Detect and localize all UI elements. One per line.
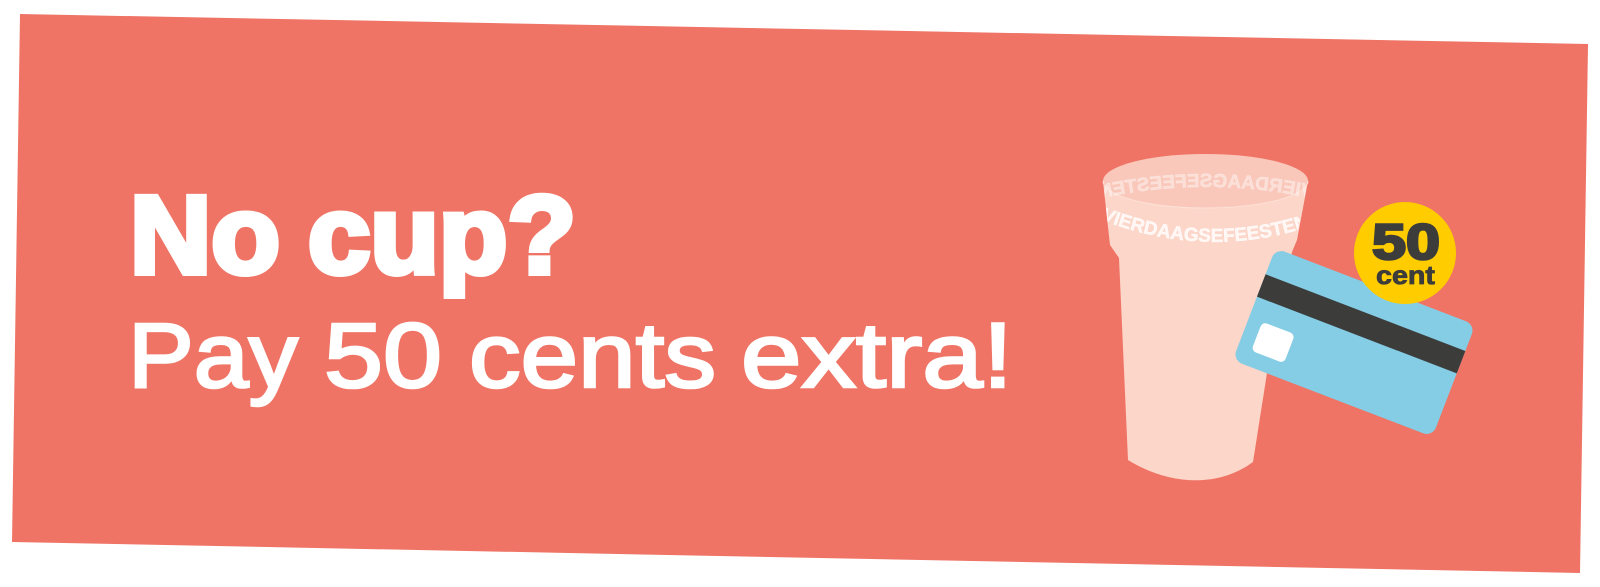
subheading: Pay 50 cents extra!: cents — [469, 305, 716, 407]
badge: 50 cent — [1354, 202, 1456, 304]
text on inside of cup: VIERDAAGSEFEESTEN — [1104, 173, 1306, 198]
card chip — [1251, 322, 1295, 363]
subheading: Pay 50 cents extra!: Pay — [128, 305, 298, 407]
cup body — [1103, 181, 1308, 480]
cup rim opening — [1103, 154, 1308, 208]
heading: No cup?: cup? — [308, 174, 576, 297]
subheading: Pay 50 cents extra!: 50 — [324, 305, 442, 407]
heading: No cup?: No — [130, 174, 280, 297]
badge unit: cent — [1376, 260, 1435, 290]
icon: festival cup — [1102, 154, 1308, 480]
heading: No cup? — [130, 174, 576, 297]
yellow circle — [1354, 202, 1456, 304]
subheading: Pay 50 cents extra!: extra! — [741, 305, 1013, 407]
magnetic stripe — [1257, 274, 1465, 373]
cup front rim highlight — [1103, 181, 1308, 208]
icon: bank card — [1233, 248, 1475, 437]
badge number: 50 — [1372, 214, 1440, 270]
subheading: Pay 50 cents extra! — [128, 305, 1013, 407]
card body — [1233, 248, 1475, 437]
text on outside of cup: VIERDAAGSEFEESTEN — [1106, 207, 1300, 242]
